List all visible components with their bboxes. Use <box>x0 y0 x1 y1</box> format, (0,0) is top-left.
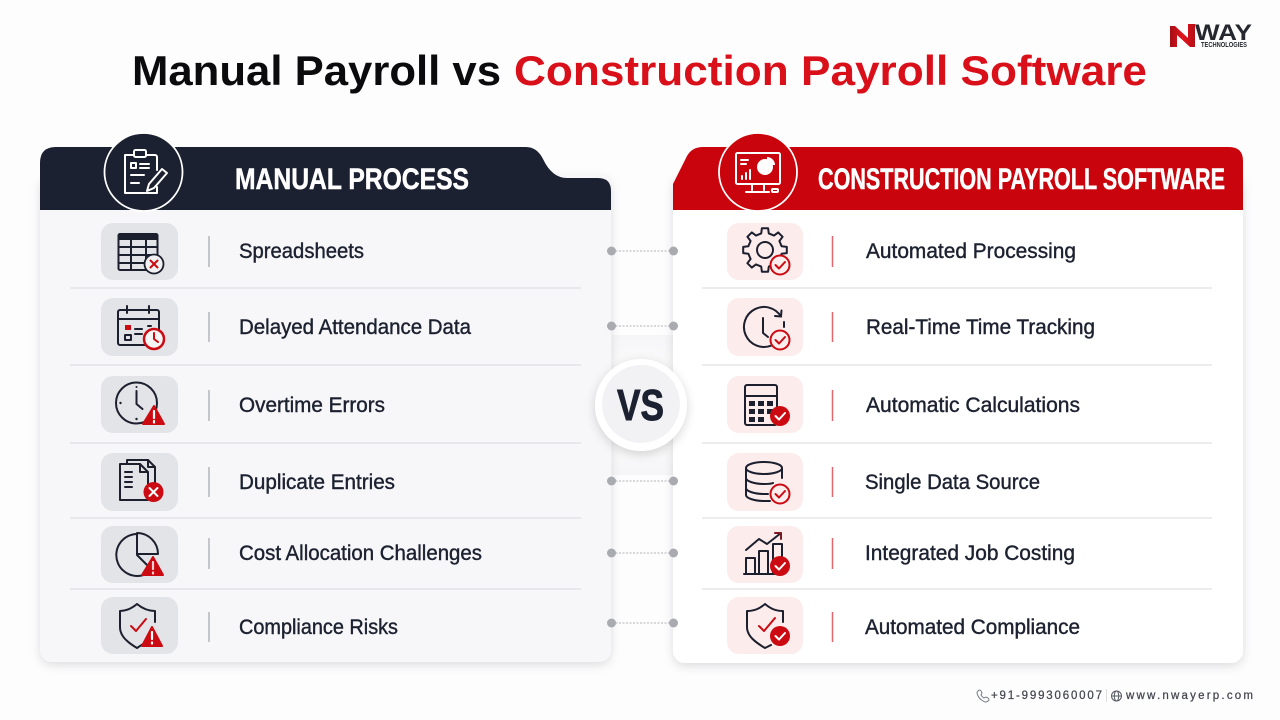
panel: manual process <box>40 133 611 662</box>
panel header: manual process: MANUAL PROCESS <box>235 163 469 196</box>
row dividers <box>702 288 1212 589</box>
title: Manual Payroll vs <box>132 47 501 94</box>
VS badge: VS <box>617 381 664 430</box>
icon: shield with warning <box>101 597 178 654</box>
title: Construction Payroll Software <box>514 47 1147 94</box>
row: Automatic Calculations <box>727 376 1080 433</box>
row: Compliance Risks <box>101 597 398 654</box>
footer contact: +91-9993060007 <box>991 690 1102 702</box>
icon: clipboard and pencil <box>104 133 182 211</box>
icon: phone <box>977 690 989 702</box>
panel: construction payroll software <box>673 133 1243 663</box>
row: Duplicate Entries <box>101 453 395 511</box>
logo: Nway Technologies <box>1170 20 1252 49</box>
icon: shield with check <box>727 597 803 654</box>
icon: calculator with check <box>727 376 803 433</box>
icon: pie chart with warning <box>101 526 178 583</box>
row: Delayed Attendance Data: Delayed Attendance Data <box>239 316 471 339</box>
row: Spreadsheets <box>101 223 364 280</box>
row: Single Data Source <box>727 453 1040 511</box>
row: Real-Time Time Tracking <box>727 298 1095 356</box>
row: Compliance Risks: Compliance Risks <box>239 616 398 639</box>
icon: gear with check <box>727 223 803 280</box>
panel body: software <box>673 175 1243 663</box>
row: Spreadsheets: Spreadsheets <box>239 240 364 263</box>
icon: database with check <box>727 453 803 511</box>
row: Cost Allocation Challenges <box>101 526 482 583</box>
logo: Nway Technologies: TECHNOLOGIES <box>1201 42 1247 49</box>
icon: spreadsheet with cross <box>101 223 178 280</box>
logo: Nway Technologies: WAY <box>1195 20 1252 45</box>
row: Automated Compliance <box>727 597 1080 654</box>
row: Real-Time Time Tracking: Real-Time Time Tracking <box>866 316 1095 339</box>
centre connector band <box>612 335 673 475</box>
footer contact <box>977 689 1253 702</box>
icon: globe <box>1112 691 1122 701</box>
icon: clock with warning <box>101 376 178 433</box>
panel body: manual <box>40 175 611 662</box>
row: Integrated Job Costing: Integrated Job Costing <box>865 542 1075 565</box>
icon: calendar with clock <box>101 298 178 356</box>
panel header: construction payroll software <box>673 147 1243 210</box>
connectors between panels <box>607 246 678 628</box>
row: Automated Compliance: Automated Compliance <box>865 616 1080 639</box>
row: Overtime Errors: Overtime Errors <box>239 394 385 417</box>
icon: documents with cross <box>101 453 178 511</box>
title <box>132 47 1147 94</box>
row: Delayed Attendance Data <box>101 298 471 356</box>
row: Cost Allocation Challenges: Cost Allocation Challenges <box>239 542 482 565</box>
row dividers <box>70 288 581 589</box>
VS badge <box>595 359 687 451</box>
icon: monitor with charts <box>719 133 797 211</box>
icon: clock with arrow and check <box>727 298 803 356</box>
row: Overtime Errors <box>101 376 385 433</box>
row: Automatic Calculations: Automatic Calculations <box>866 394 1080 417</box>
row: Automated Processing: Automated Processing <box>866 240 1076 263</box>
row: Single Data Source: Single Data Source <box>865 471 1040 494</box>
footer contact: www.nwayerp.com <box>1125 690 1253 702</box>
icon: growth chart with check <box>727 526 803 583</box>
row: Duplicate Entries: Duplicate Entries <box>239 471 395 494</box>
row: Integrated Job Costing <box>727 526 1075 583</box>
row: Automated Processing <box>727 223 1076 280</box>
panel header: manual process <box>40 147 611 210</box>
